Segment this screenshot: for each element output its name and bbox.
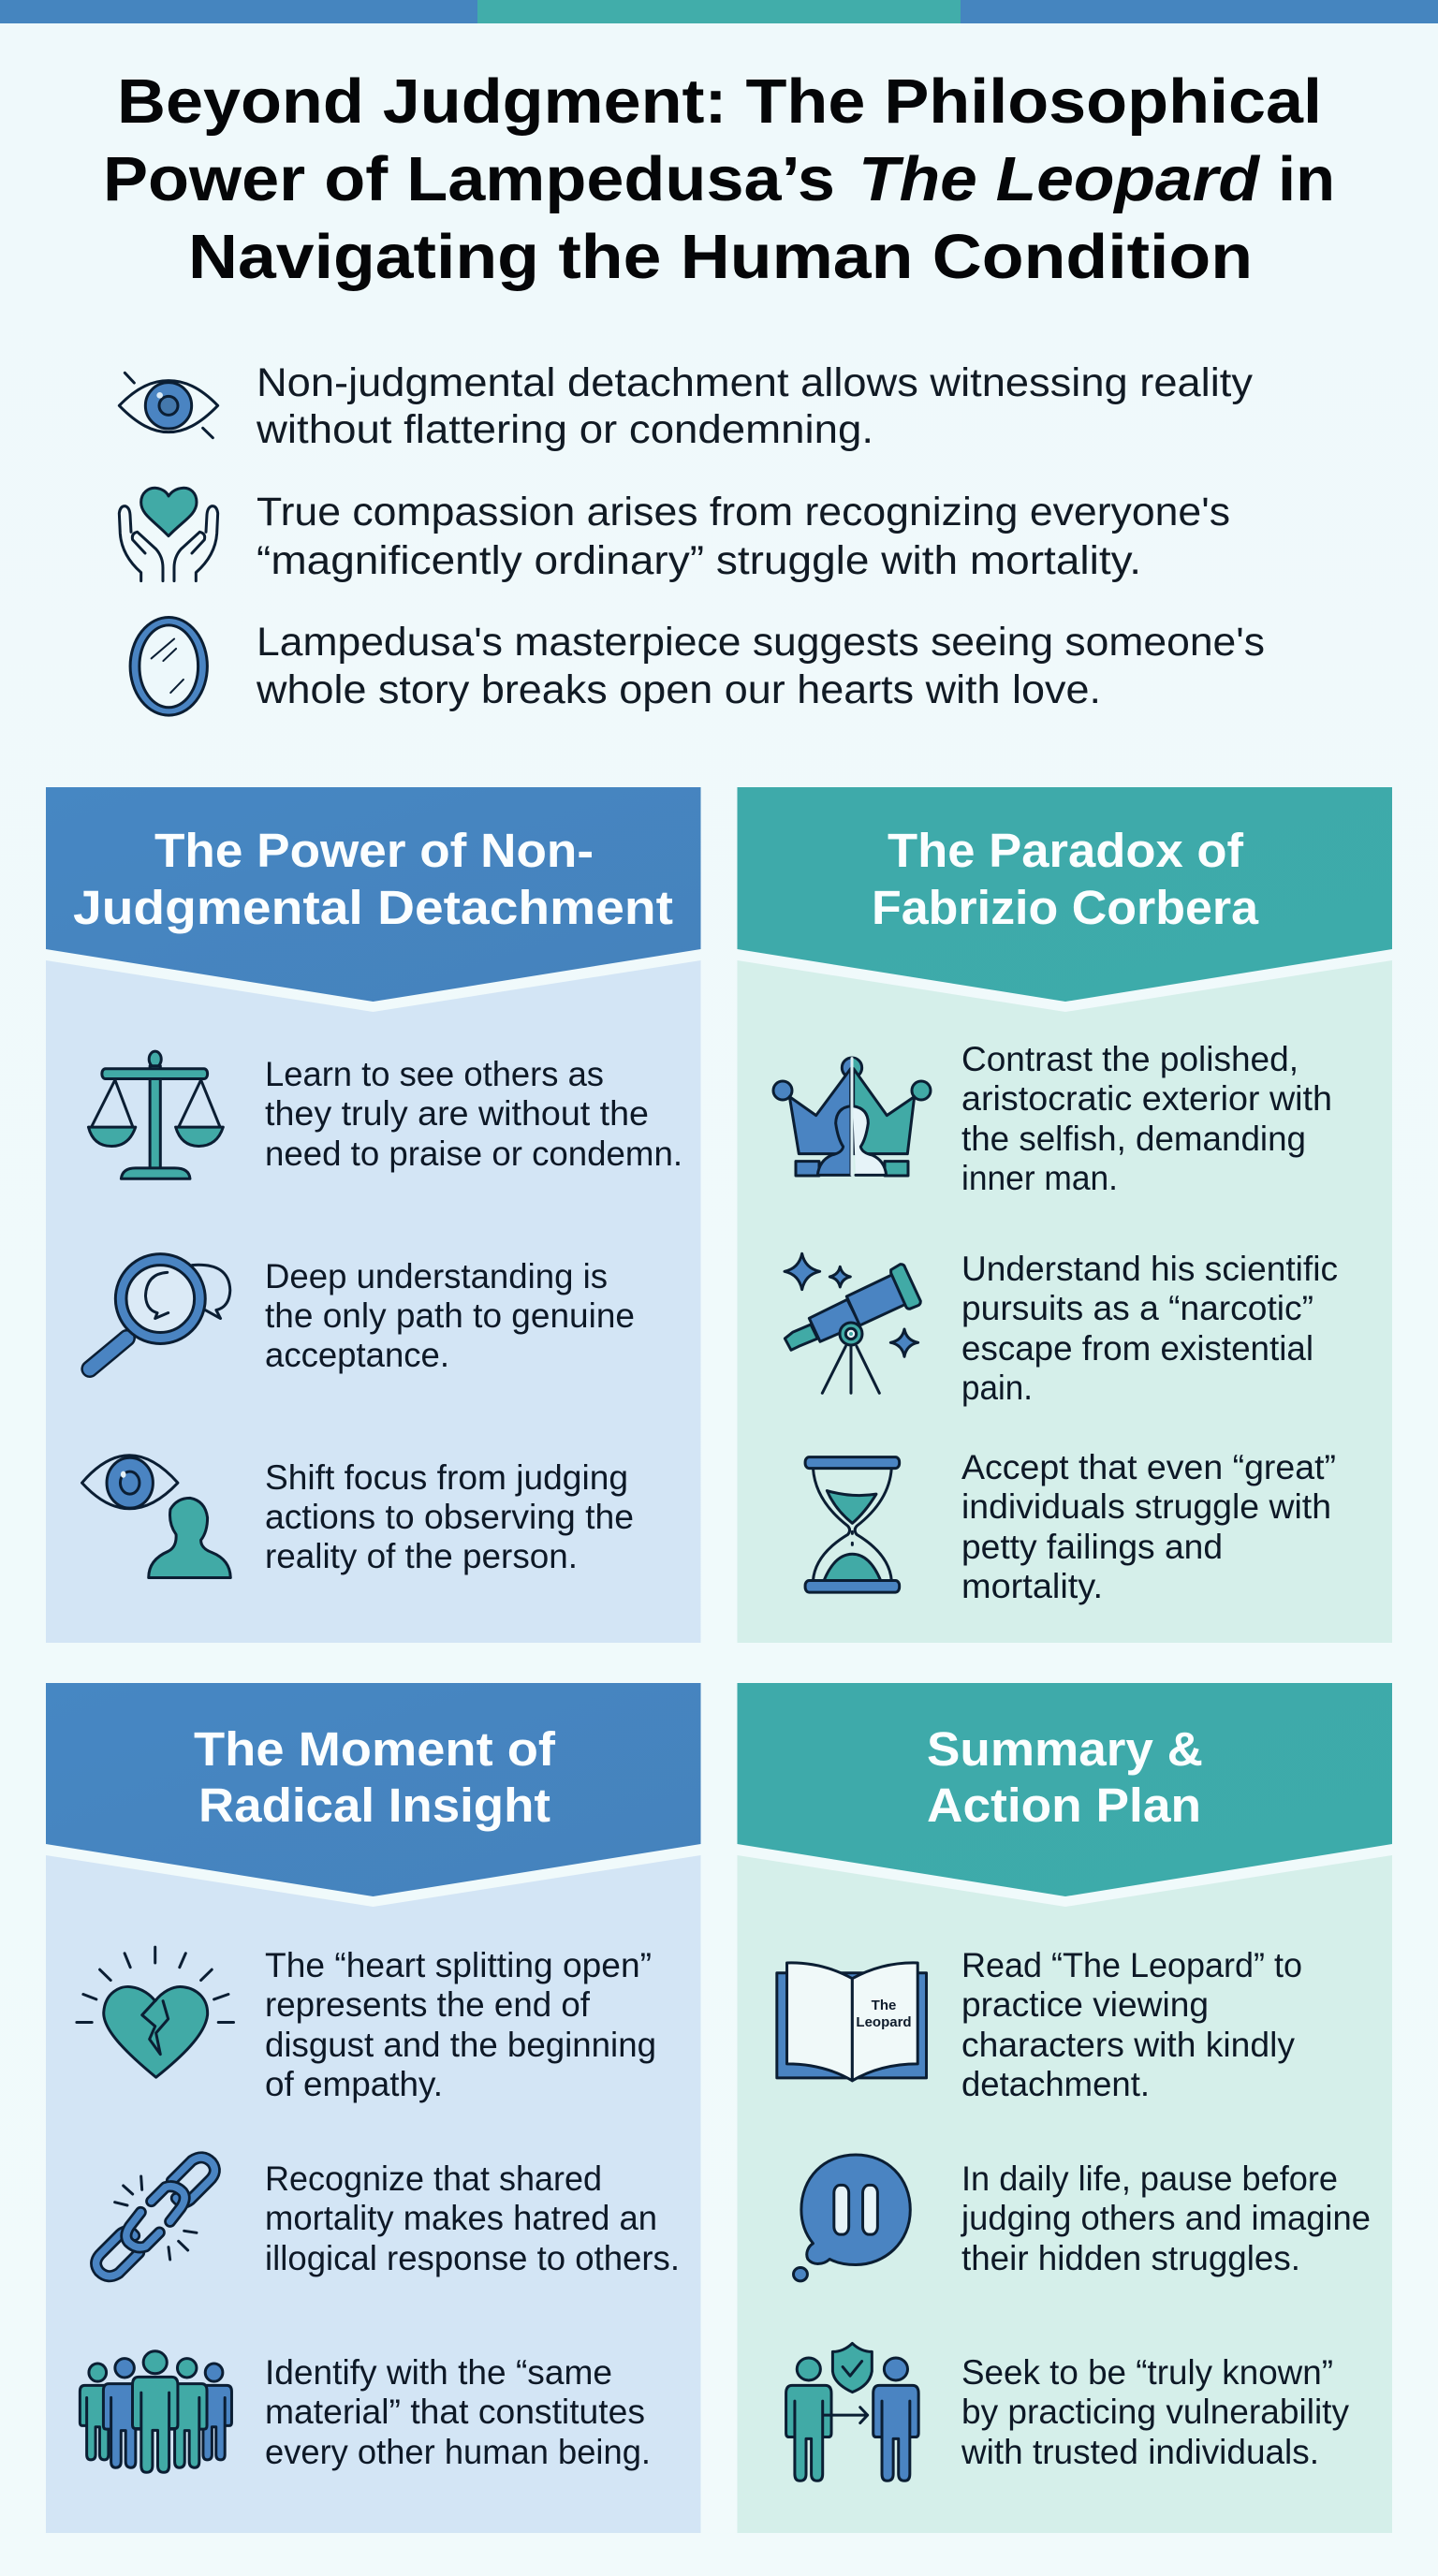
item text [265, 2159, 680, 2277]
item text: of empathy. [265, 2065, 443, 2103]
item text: Shift focus from judging [265, 1458, 628, 1497]
panel heading: Action Plan [927, 1778, 1201, 1832]
item text: individuals struggle with [961, 1487, 1331, 1526]
title [103, 66, 1335, 292]
icon: hands holding heart [119, 488, 218, 581]
item text [265, 1257, 635, 1374]
item text: pain. [961, 1368, 1033, 1407]
item text [265, 2353, 651, 2471]
item text: mortality makes hatred an [265, 2199, 657, 2237]
item text: material” that constitutes [265, 2393, 645, 2431]
item text: actions to observing the [265, 1498, 634, 1536]
intro list [119, 360, 1265, 715]
item text: Deep understanding is [265, 1257, 608, 1295]
item text [265, 1458, 634, 1575]
item text [265, 1946, 656, 2103]
panel heading [872, 824, 1259, 934]
intro text 2 [257, 490, 1230, 583]
icon: magnifier with speech bubbles [90, 1254, 230, 1368]
item text: they truly are without the [265, 1094, 649, 1133]
item text: illogical response to others. [265, 2239, 680, 2277]
intro text 1: without flattering or condemning. [256, 407, 873, 452]
panel heading: The Paradox of [888, 824, 1244, 877]
icon: eye [119, 373, 218, 438]
item text: In daily life, pause before [961, 2159, 1338, 2198]
item text: the selfish, demanding [961, 1120, 1306, 1158]
item text [961, 2353, 1350, 2471]
title: Navigating the Human Condition [188, 222, 1253, 292]
item text: Learn to see others as [265, 1055, 604, 1093]
item text: the only path to genuine [265, 1296, 635, 1335]
icon: broken heart [77, 1947, 234, 2077]
item text: pursuits as a “narcotic” [961, 1289, 1313, 1327]
panel header banner [46, 787, 700, 1002]
panel: The Paradox of Fabrizio Corbera [738, 787, 1392, 1643]
panel heading: Fabrizio Corbera [872, 881, 1259, 934]
icon: balance scales [88, 1051, 223, 1178]
item text: The “heart splitting open” [265, 1946, 652, 1984]
intro text 1: Non-judgmental detachment allows witnessing reality [257, 360, 1254, 405]
intro text 2: True compassion arises from recognizing everyone's [257, 490, 1230, 534]
panel heading [73, 824, 673, 934]
icon: telescope and stars [785, 1253, 920, 1393]
item text [961, 1040, 1332, 1197]
panel: The Power of Non-Judgmental Detachment [46, 787, 700, 1643]
panel body [46, 960, 700, 1643]
icon: open book [777, 1963, 927, 2081]
panel heading: Judgmental Detachment [73, 881, 673, 934]
item text: practice viewing [961, 1985, 1209, 2024]
item text: detachment. [961, 2065, 1150, 2103]
item text: need to praise or condemn. [265, 1134, 682, 1173]
intro text 3: whole story breaks open our hearts with love. [256, 667, 1101, 712]
icon: eye observing person [81, 1456, 230, 1577]
item text: reality of the person. [265, 1537, 578, 1575]
panel heading: Summary & [927, 1722, 1203, 1776]
panel body [46, 1855, 700, 2533]
icon: broken chain [96, 2158, 214, 2276]
panel body [738, 1855, 1392, 2533]
item text [265, 1055, 682, 1173]
panel heading [194, 1722, 556, 1832]
intro text 3 [256, 620, 1265, 712]
item text: by practicing vulnerability [961, 2393, 1350, 2431]
item text [961, 1250, 1338, 1407]
item text: Accept that even “great” [961, 1448, 1336, 1486]
item text: Recognize that shared [265, 2159, 602, 2198]
icon: two people with shield [786, 2343, 918, 2481]
icon: open book: The [872, 1998, 896, 2013]
panel header banner [738, 1683, 1392, 1896]
item text: every other human being. [265, 2433, 651, 2471]
item text: represents the end of [265, 1985, 591, 2024]
panel: Summary & Action Plan [738, 1683, 1392, 2533]
item text: Read “The Leopard” to [961, 1946, 1302, 1984]
item text: characters with kindly [961, 2026, 1296, 2064]
intro text 3: Lampedusa's masterpiece suggests seeing someone's [257, 620, 1265, 665]
title: Beyond Judgment: The Philosophical [117, 66, 1322, 137]
panel heading: Radical Insight [198, 1778, 550, 1832]
item text [961, 2159, 1371, 2277]
item text [961, 1448, 1336, 1605]
item text: Understand his scientific [961, 1250, 1338, 1288]
intro text 2: “magnificently ordinary” struggle with mortality. [257, 538, 1141, 583]
item text: inner man. [961, 1159, 1118, 1197]
intro text 1 [256, 360, 1254, 452]
title: The Leopard [858, 144, 1261, 214]
item text [961, 1946, 1302, 2103]
item text: judging others and imagine [961, 2199, 1371, 2237]
item text: Identify with the “same [265, 2353, 612, 2392]
panel heading: The Power of Non- [154, 824, 594, 877]
icon: open book: Leopard [856, 2014, 912, 2030]
icon: crown with split person [773, 1058, 931, 1176]
item text: Contrast the polished, [961, 1040, 1299, 1078]
icon: mirror [130, 618, 207, 715]
item text: petty failings and [961, 1528, 1223, 1566]
title: Power of Lampedusa’s [103, 144, 835, 214]
item text: with trusted individuals. [961, 2433, 1319, 2471]
panel heading [927, 1722, 1203, 1832]
item text: mortality. [961, 1567, 1103, 1605]
top colour bar [0, 0, 1438, 23]
item text: escape from existential [961, 1329, 1313, 1368]
icon: group of people [80, 2351, 231, 2472]
item text: acceptance. [265, 1336, 449, 1374]
item text: their hidden struggles. [961, 2239, 1300, 2277]
panel body [738, 960, 1392, 1643]
panel header banner [46, 1683, 700, 1896]
panel heading: The Moment of [194, 1722, 556, 1776]
item text: aristocratic exterior with [961, 1079, 1332, 1118]
title: in [1278, 144, 1335, 214]
icon: hourglass [805, 1457, 900, 1592]
panel header banner [738, 787, 1392, 1002]
panel: The Moment of Radical Insight [46, 1683, 700, 2533]
item text: disgust and the beginning [265, 2026, 656, 2064]
item text: Seek to be “truly known” [961, 2353, 1333, 2392]
icon: thought bubble with pause [794, 2155, 910, 2281]
